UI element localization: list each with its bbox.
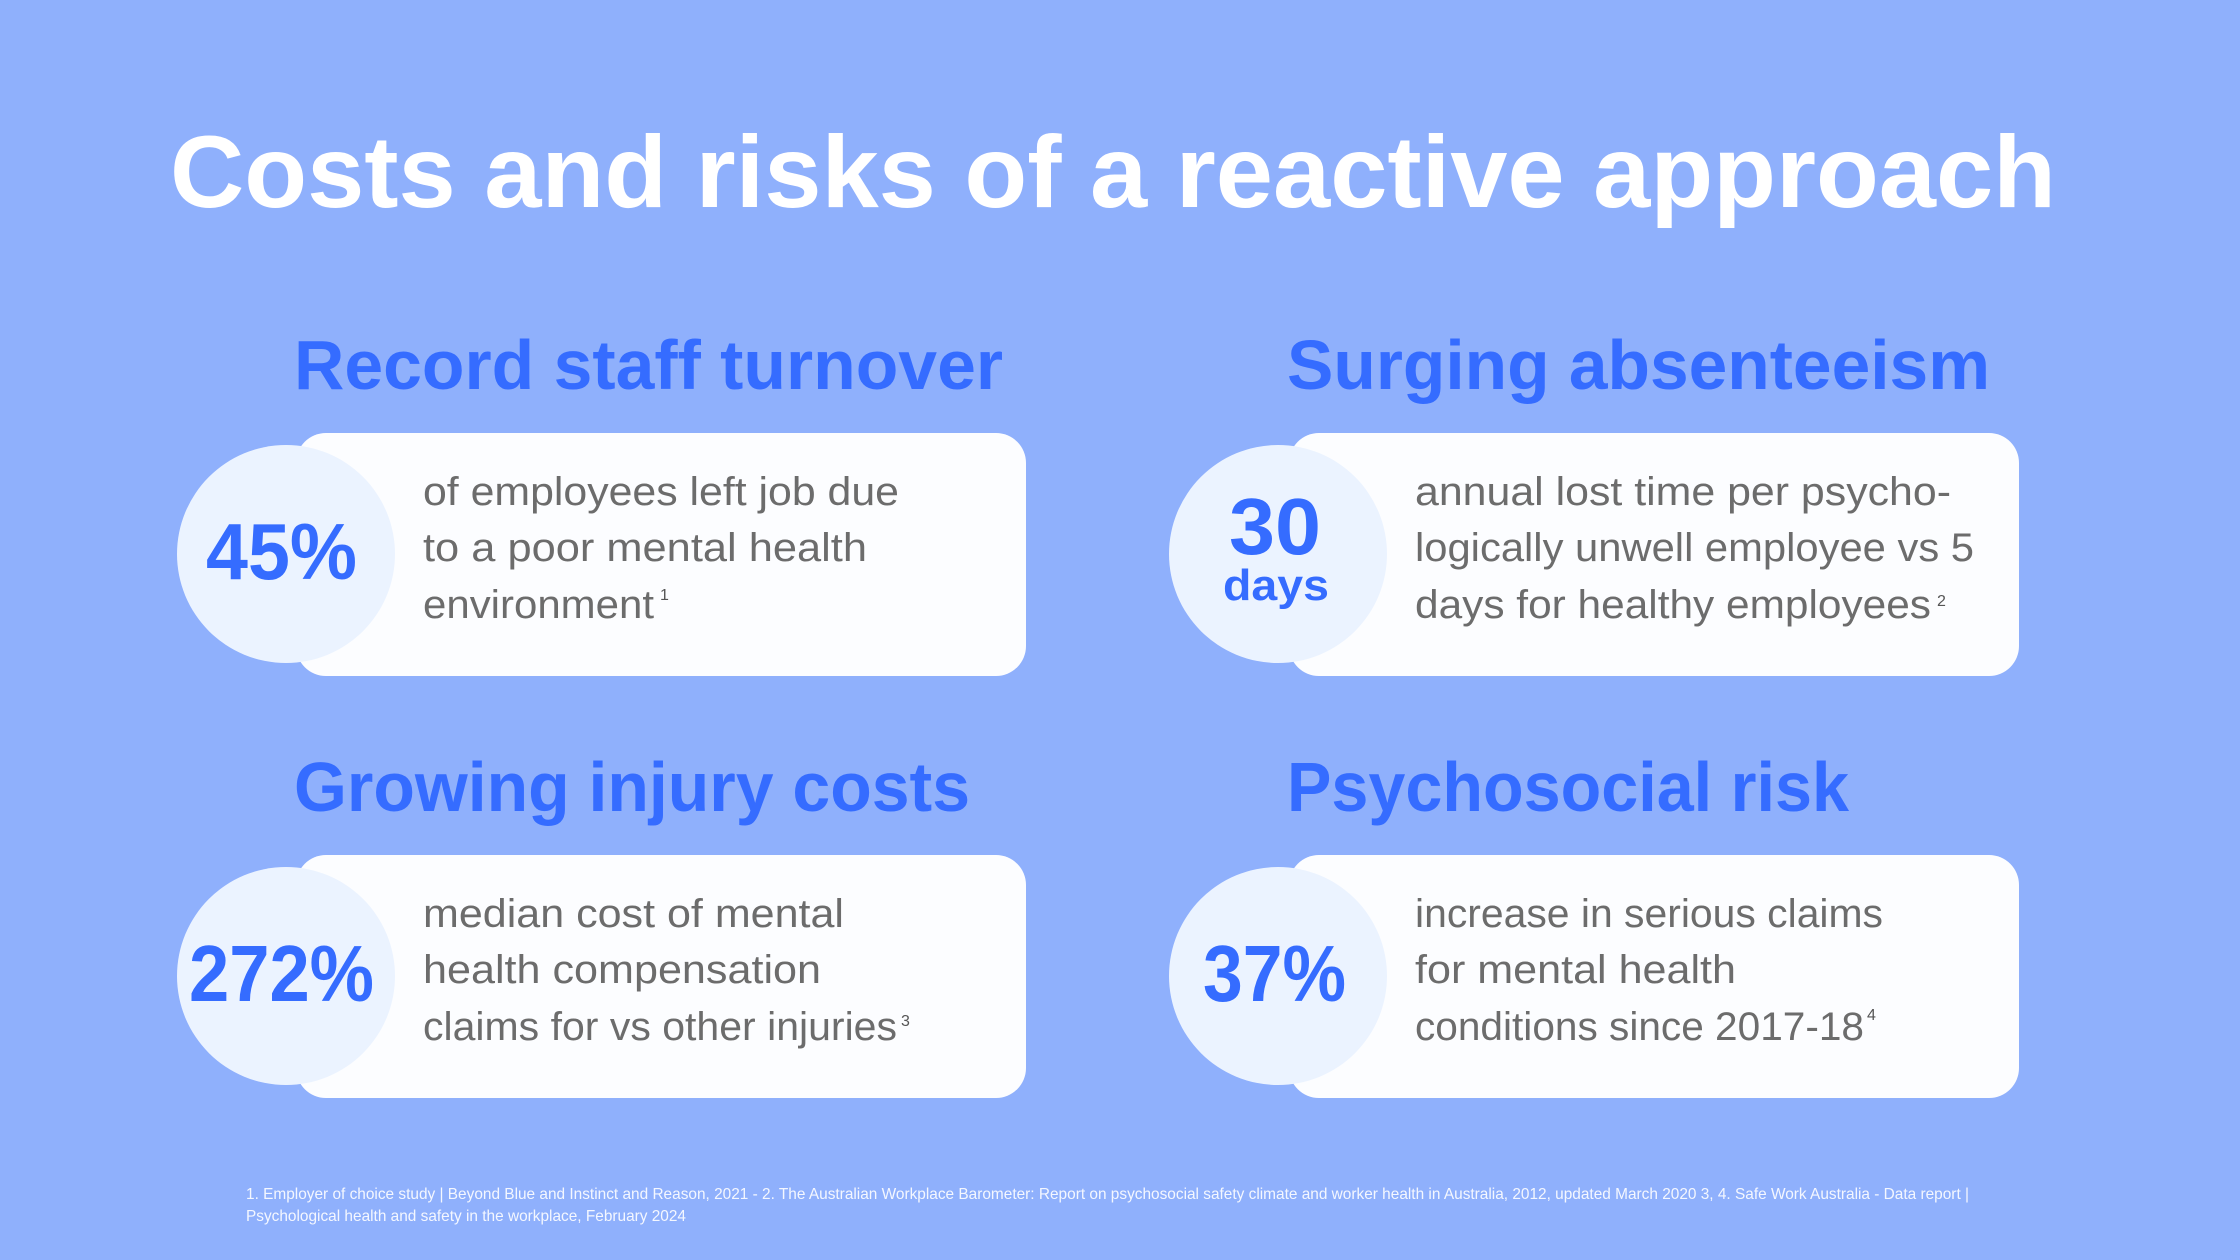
panel: surging absenteeism <box>1169 326 2019 676</box>
panel: psychosocial risk <box>1169 748 2019 1098</box>
text: absenteeism description: 2 <box>1937 593 1946 610</box>
card: absenteeism <box>1289 433 2019 676</box>
panel: record staff turnover <box>177 326 1026 676</box>
text: psychosocial risk description: increase in serious claims <box>1415 892 1883 936</box>
heading: psychosocial risk: Psychosocial risk <box>1287 748 1849 826</box>
stat: 30 days <box>1223 482 1329 610</box>
text: absenteeism description <box>1415 470 1974 627</box>
heading: surging absenteeism: Surging absenteeism <box>1287 326 1990 404</box>
stat: 30 days: days <box>1223 561 1329 610</box>
footnote: sources: 1. Employer of choice study | Beyond Blue and Instinct and Reason, 2021 - 2. The Australian Workplace Barometer: Report on psychosocial safety climate and worker health in Australia, 2012, updated March 2020 3, 4. Safe Work Australia - Data report | <box>246 1186 1969 1203</box>
text: absenteeism description: annual lost time per psycho- <box>1415 470 1951 514</box>
circle: absenteeism stat <box>1169 445 1387 663</box>
text: turnover description: 1 <box>660 587 669 604</box>
footnote: sources: Psychological health and safety in the workplace, February 2024 <box>246 1208 686 1225</box>
text: psychosocial risk description: 4 <box>1867 1007 1876 1024</box>
text: psychosocial risk description <box>1415 892 1883 1049</box>
text: absenteeism description: days for healthy employees <box>1415 583 1931 627</box>
heading: record staff turnover: Record staff turnover <box>294 326 1003 404</box>
text: turnover description: to a poor mental health <box>423 526 867 570</box>
text: injury costs description: 3 <box>901 1013 910 1030</box>
stat: 30 days: 30 <box>1229 482 1321 571</box>
title: Costs and risks of a reactive approach <box>170 115 2056 229</box>
text: turnover description <box>423 470 899 627</box>
text: psychosocial risk description: conditions since 2017-18 <box>1415 1005 1864 1049</box>
heading: growing injury costs: Growing injury costs <box>294 748 970 826</box>
circle: psychosocial risk stat <box>1169 867 1387 1085</box>
circle: injury costs stat <box>177 867 395 1085</box>
text: psychosocial risk description: for mental health <box>1415 948 1736 992</box>
stat: 272%: 272% <box>189 929 374 1018</box>
panel: growing injury costs <box>177 748 1026 1098</box>
text: turnover description: of employees left job due <box>423 470 899 514</box>
footnote: sources <box>246 1186 1969 1225</box>
card: psychosocial risk <box>1289 855 2019 1098</box>
text: injury costs description <box>423 892 910 1049</box>
stat: 45%: 45% <box>206 507 357 596</box>
text: injury costs description: claims for vs other injuries <box>423 1005 897 1049</box>
card: turnover <box>296 433 1026 676</box>
card: injury costs <box>296 855 1026 1098</box>
circle: turnover stat <box>177 445 395 663</box>
text: injury costs description: median cost of mental <box>423 892 844 936</box>
stat: 37%: 37% <box>1203 929 1346 1018</box>
text: absenteeism description: logically unwell employee vs 5 <box>1415 526 1974 570</box>
text: turnover description: environment <box>423 583 654 627</box>
text: injury costs description: health compensation <box>423 948 821 992</box>
